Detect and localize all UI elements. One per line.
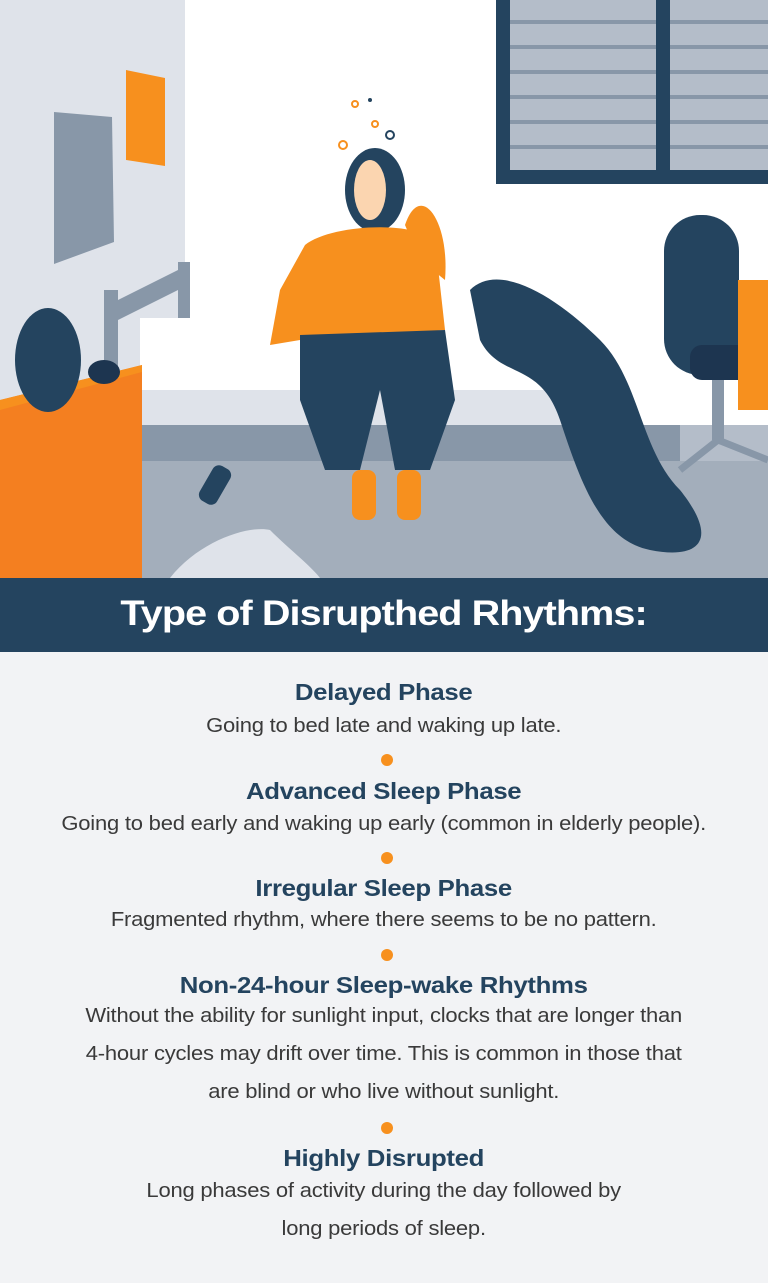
item: delayed phase: Delayed Phase bbox=[295, 679, 472, 705]
item: irregular sleep phase bbox=[111, 875, 657, 931]
item: advanced sleep phase: Advanced Sleep Phase bbox=[246, 778, 521, 804]
dot bbox=[381, 852, 393, 864]
pillow bbox=[170, 529, 320, 578]
bed bbox=[104, 262, 680, 461]
dot bbox=[381, 1122, 393, 1134]
item: advanced sleep phase bbox=[61, 778, 706, 835]
item: non-24-hour: Non-24-hour Sleep-wake Rhythms bbox=[180, 972, 588, 998]
item: advanced sleep phase: Going to bed early and waking up early (common in elderly people). bbox=[61, 813, 706, 835]
item: delayed phase: Going to bed late and waking up late. bbox=[206, 715, 561, 737]
item: highly disrupted: long periods of sleep. bbox=[282, 1218, 486, 1240]
posters bbox=[54, 70, 165, 264]
sock bbox=[196, 463, 234, 507]
item: non-24-hour: 4-hour cycles may drift over time. This is common in those that bbox=[86, 1043, 682, 1065]
dot bbox=[381, 949, 393, 961]
item: highly disrupted: Long phases of activity during the day followed by bbox=[146, 1180, 621, 1202]
item: non-24-hour: Without the ability for sunlight input, clocks that are longer than bbox=[85, 1005, 682, 1027]
blanket bbox=[470, 280, 701, 552]
person bbox=[270, 98, 455, 520]
item: non-24-hour bbox=[85, 972, 682, 1103]
floor bbox=[0, 425, 768, 578]
item: irregular sleep phase: Fragmented rhythm, where there seems to be no pattern. bbox=[111, 909, 657, 931]
illustration: messy bedroom bbox=[0, 0, 768, 578]
title banner bbox=[0, 578, 768, 652]
item: highly disrupted: Highly Disrupted bbox=[283, 1145, 484, 1171]
item: non-24-hour: are blind or who live without sunlight. bbox=[208, 1081, 559, 1103]
window bbox=[496, 0, 768, 184]
left wall bbox=[0, 0, 185, 440]
dot bbox=[381, 754, 393, 766]
chair bbox=[664, 215, 768, 470]
item: highly disrupted bbox=[146, 1145, 621, 1240]
item: delayed phase bbox=[206, 679, 561, 737]
dresser and backpack bbox=[0, 308, 142, 578]
title: Type of Disrupthed Rhythms: bbox=[120, 594, 647, 633]
item: irregular sleep phase: Irregular Sleep Phase bbox=[255, 875, 512, 901]
